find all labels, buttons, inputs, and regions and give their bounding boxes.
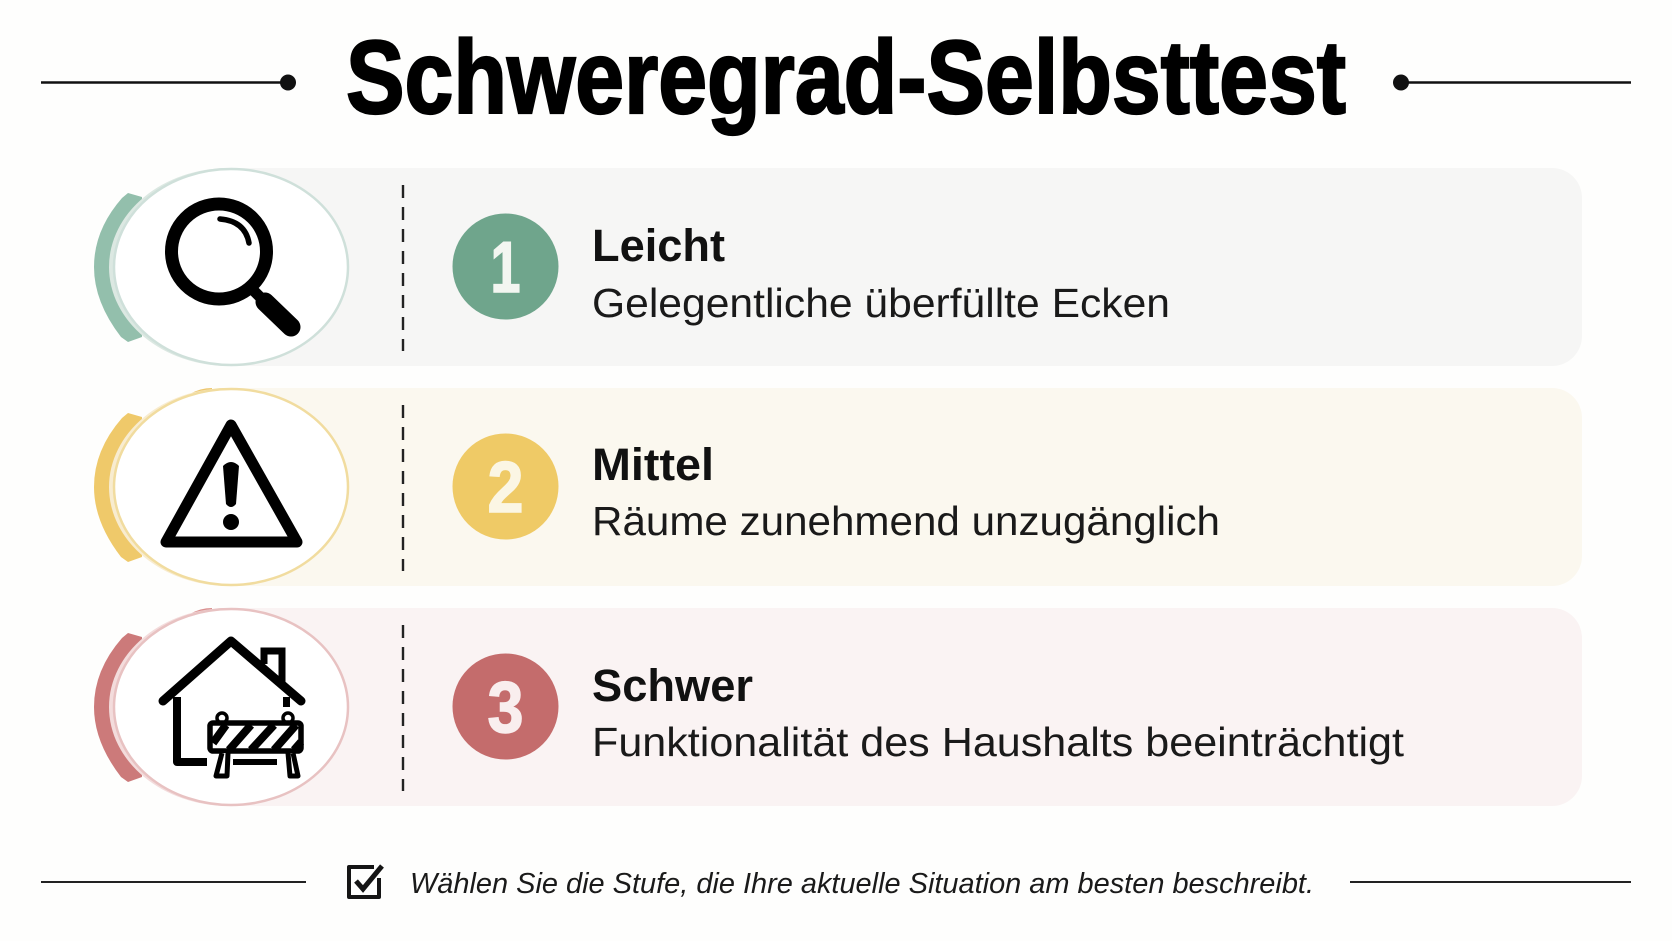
number badge 2: 2: [488, 448, 524, 528]
level text: Schwer: Funktionalität des Haushalts beeinträchtigt: [592, 719, 1405, 765]
footer note: Wählen Sie die Stufe, die Ihre aktuelle Situation am besten beschreibt.: [410, 868, 1314, 900]
level text: Leicht: Gelegentliche überfüllte Ecken: [592, 280, 1170, 326]
level text: Schwer: Schwer: [592, 660, 753, 711]
title with side rules: Schweregrad-Selbsttest: [346, 20, 1346, 136]
level text: Mittel: Räume zunehmend unzugänglich: [592, 498, 1220, 544]
level text: Mittel: Mittel: [592, 439, 714, 490]
icon: magnifying glass badge: [94, 168, 349, 366]
level text: Mittel: [592, 439, 1220, 544]
number badge 1: 1: [490, 228, 520, 308]
level text: Leicht: [592, 220, 1170, 326]
icon: house with barrier badge: [94, 608, 349, 806]
level text: Leicht: Leicht: [592, 220, 725, 271]
number badge 3: 3: [488, 668, 524, 748]
number badge 1: [452, 214, 558, 320]
footer note: [41, 866, 1631, 900]
icon: checkbox: [349, 866, 382, 897]
number badge 2: [452, 434, 558, 540]
level text: Schwer: [592, 660, 1405, 765]
panel: Mittel: [94, 388, 1582, 586]
number badge 3: [452, 654, 558, 760]
panel: Leicht: [94, 168, 1582, 366]
icon: warning triangle badge: [94, 388, 349, 586]
panel: Schwer: [94, 608, 1582, 806]
